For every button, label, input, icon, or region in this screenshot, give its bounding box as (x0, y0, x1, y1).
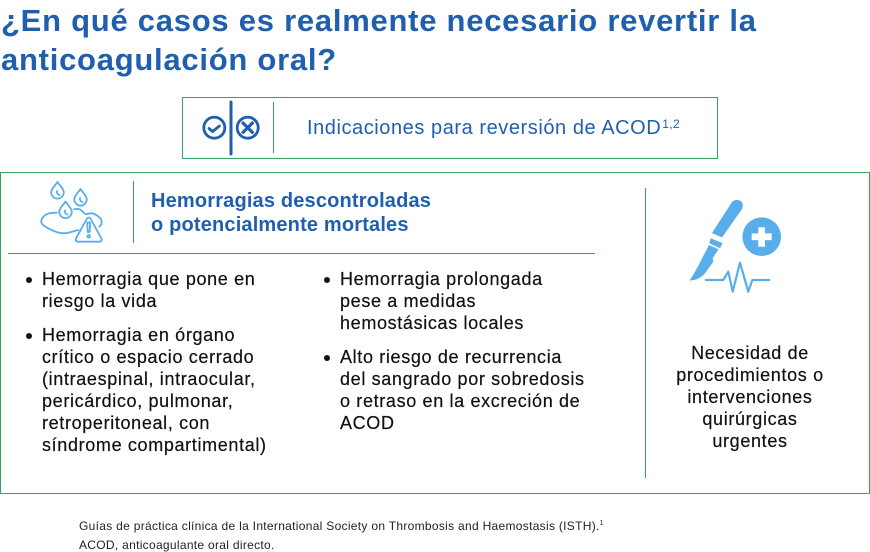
text block: right bullets: ACOD (340, 413, 395, 433)
text block: right bullets: Hemorragia prolongada (340, 269, 543, 289)
text block: right bullets: pese a medidas (340, 291, 476, 311)
text block: left bullets: síndrome compartimental) (42, 435, 267, 455)
text block: right bullets (324, 269, 585, 433)
heading: o potencialmente mortales (151, 214, 409, 236)
text block: left bullets: (intraespinal, intraocular, (42, 369, 256, 389)
title (1, 3, 757, 77)
text block: left bullets: Hemorragia en órgano (42, 325, 235, 345)
text block: left bullets: Hemorragia que pone en (42, 269, 255, 289)
panel: hemorragias (0, 172, 870, 494)
text block: right bullets: o retraso en la excreción de (340, 391, 580, 411)
text block: left bullets: riesgo la vida (42, 291, 157, 311)
text block: left bullets: pericárdico, pulmonar, (42, 391, 233, 411)
footnote: ACOD, anticoagulante oral directo. (79, 538, 275, 552)
text block: surgery need: Necesidad de (691, 343, 809, 363)
text block: surgery need: urgentes (712, 431, 788, 451)
text block: right bullets: Alto riesgo de recurrencia (340, 347, 562, 367)
heading (151, 190, 431, 236)
text block: left bullets (26, 269, 267, 456)
footnote: Guías de práctica clínica de la International Society on Thrombosis and Haemostasis (ISTH).1 (79, 518, 604, 533)
text block: surgery need (676, 343, 824, 452)
icon: blood drops and warning (40, 181, 103, 243)
header text: Indicaciones para reversión de ACOD1,2 (307, 117, 680, 139)
title: anticoagulación oral? (1, 42, 337, 77)
icon: scalpel, plus and pulse (690, 200, 781, 293)
text block: right bullets: hemostásicas locales (340, 313, 524, 333)
text block: surgery need: quirúrgicas (702, 409, 798, 429)
heading: Hemorragias descontroladas (151, 190, 431, 212)
text block: left bullets: retroperitoneal, con (42, 413, 210, 433)
text block: surgery need: intervenciones (687, 387, 813, 407)
title: ¿En qué casos es realmente necesario revertir la (1, 3, 757, 38)
text block: right bullets: del sangrado por sobredosis (340, 369, 585, 389)
text block: left bullets: crítico o espacio cerrado (42, 347, 254, 367)
icon: check and cross (202, 100, 260, 156)
footnote (79, 518, 604, 552)
panel: indicaciones header (182, 97, 718, 159)
text block: surgery need: procedimientos o (676, 365, 824, 385)
